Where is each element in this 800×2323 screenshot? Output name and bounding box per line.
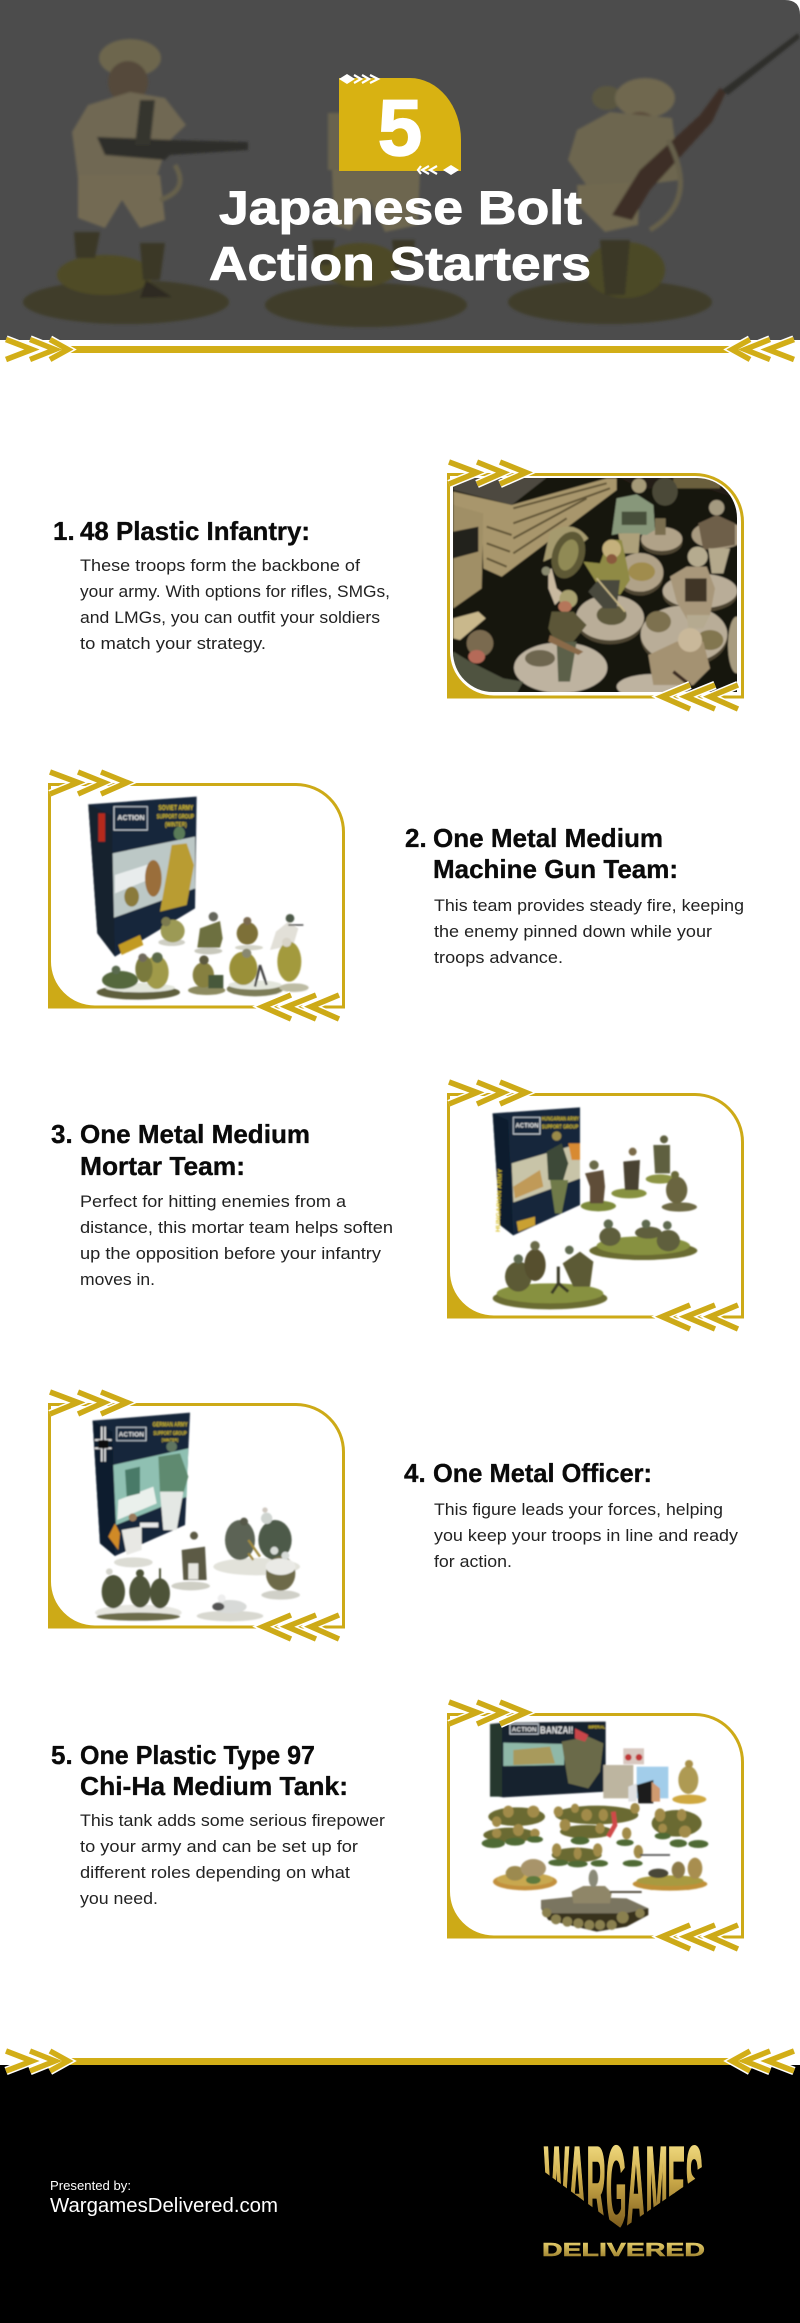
presented by text: Presented by: [50,2178,131,2193]
panel: item 2 photo frame [48,772,345,1019]
panel: item 5 text: you need. [80,1890,158,1908]
footer panel [0,2051,800,2323]
image: Banzai starter army box, tank and miniatures: IMPERIAL [588,1724,605,1729]
image: Hungarian army support group box and miniatures: SUPPORT GROUP [542,1124,578,1130]
panel: item 1 text: These troops form the backbone of [80,557,360,575]
panel: item 1 text [53,516,390,653]
panel: item 3 text [51,1119,393,1289]
panel: item 3 text: Perfect for hitting enemies from a [80,1193,347,1211]
panel: item 4 text: you keep your troops in line and ready [434,1527,739,1545]
badge: number 5 [339,74,461,175]
panel: item 4 text: 4. [404,1458,426,1488]
image: Soviet army support group box and miniatures: SUPPORT GROUP [157,813,194,820]
panel: item 2 text: the enemy pinned down while your [434,923,713,941]
image: German army support group box and miniatures: ACTION [119,1432,144,1439]
panel: item 4 text: for action. [434,1553,512,1571]
title: Japanese Bolt [219,181,582,234]
panel: item 1 text: 48 Plastic Infantry: [80,516,310,546]
bottom divider banner [6,2051,794,2071]
panel: item 1 text: your army. With options for rifles, SMGs, [80,583,390,601]
panel: item 5 text: Chi-Ha Medium Tank: [80,1771,348,1801]
panel: item 3 text: moves in. [80,1271,155,1289]
panel: item 5 photo frame [447,1702,744,1949]
header panel [0,0,800,340]
panel: item 3 text: One Metal Medium [80,1119,310,1149]
panel: item 2 text: 2. [405,823,427,853]
panel: item 1 text: and LMGs, you can outfit your soldiers [80,609,380,627]
panel: item 4 text: This figure leads your forces, helping [434,1501,723,1519]
panel: item 1 text: 1. [53,516,75,546]
panel: item 2 text: troops advance. [434,949,563,967]
badge top-left ornament [339,74,378,84]
panel: item 4 photo frame [48,1392,345,1639]
image: Soviet army support group box and miniatures: ACTION [117,813,145,822]
panel: item 3 text: up the opposition before your infantry [80,1245,382,1263]
image: Hungarian army support group box and miniatures: ACTION [515,1123,539,1129]
panel: item 5 text: 5. [51,1740,73,1770]
panel: item 4 text [404,1458,739,1571]
image: Banzai starter army box, tank and miniatures: BANZAI! [540,1725,573,1736]
image: Hungarian army support group box and miniatures: HUNGARIAN ARMY [542,1117,579,1123]
title [209,181,591,290]
logo: Wargames Delivered: DELIVERED [542,2240,705,2260]
blurred miniature figures [23,33,800,327]
image: German army support group box and miniatures: SUPPORT GROUP [153,1431,187,1437]
image: Soviet army support group box and miniatures: SOVIET ARMY [158,803,193,812]
presented by text: WargamesDelivered.com [50,2194,278,2217]
badge: number 5: 5 [378,83,422,172]
panel: item 2 text: This team provides steady fire, keeping [434,897,744,915]
image: Banzai starter army box, tank and miniatures [482,1722,708,1932]
panel: item 5 text: One Plastic Type 97 [80,1740,315,1770]
panel: item 2 text [405,823,744,967]
panel: item 5 text [51,1740,386,1908]
panel: item 3 text: 3. [51,1119,73,1149]
logo: Wargames Delivered [544,2144,704,2256]
panel: item 2 text: Machine Gun Team: [433,854,678,884]
image: Banzai starter army box, tank and miniatures: ACTION [512,1728,537,1734]
image: Hungarian army support group box and miniatures [493,1107,697,1309]
panel: item 5 text: This tank adds some serious firepower [80,1812,386,1830]
panel: item 3 photo frame [447,1082,744,1329]
panel: item 1 photo frame [447,462,745,709]
panel: item 4 text: One Metal Officer: [433,1458,652,1488]
panel: item 5 text: to your army and can be set up for [80,1838,359,1856]
image: German army support group box and miniatures: GERMAN ARMY [153,1422,188,1429]
image: German army support group box and miniatures: (WINTER) [162,1438,179,1444]
panel: item 3 text: distance, this mortar team helps soften [80,1219,393,1237]
image: Soviet army support group box and miniatures: (WINTER) [165,823,187,829]
image: Hungarian army support group box and miniatures: HUNGARIAN ARMY [496,1169,504,1232]
panel: item 2 text: One Metal Medium [433,823,663,853]
panel: item 1 text: to match your strategy. [80,635,266,653]
photo: painted infantry beside truck [450,475,745,699]
panel: item 5 text: different roles depending on what [80,1864,350,1882]
title: Action Starters [209,237,591,290]
panel: item 3 text: Mortar Team: [80,1151,245,1181]
presented by text [50,2178,278,2217]
image: German army support group box and miniatures [93,1413,300,1621]
image: Soviet army support group box and miniatures [88,797,309,1000]
top divider banner [6,340,794,360]
